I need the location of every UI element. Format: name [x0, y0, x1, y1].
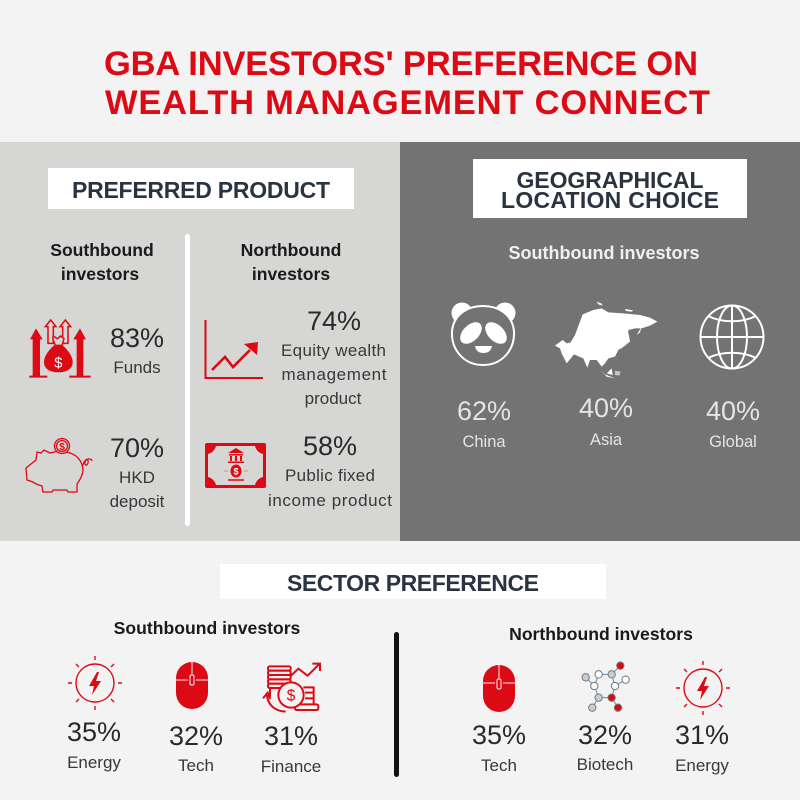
- subheading: southbound investors: Southbound investors: [508, 243, 700, 263]
- column heading: northbound investors: Northbound: [241, 240, 341, 260]
- icon: map of Asia: [555, 302, 657, 378]
- text: 62% china: 62%: [457, 396, 511, 426]
- icon: computer mouse: [176, 662, 208, 709]
- text: 40% asia: Asia: [590, 431, 623, 449]
- text: 62% china: China: [462, 433, 506, 451]
- text: 35% energy: 35%: [67, 717, 121, 747]
- column heading: southbound investors: Southbound: [50, 240, 154, 260]
- icon: energy: [68, 656, 122, 710]
- title: GBA INVESTORS' PREFERENCE ON: [104, 45, 698, 83]
- text: 70% HKD deposit: 70%: [110, 433, 164, 463]
- text: 40% global: [706, 396, 760, 451]
- panel: sector preference: [67, 564, 730, 777]
- heading: sector preference: [220, 564, 606, 599]
- text: 62% china: [457, 396, 511, 451]
- text: 74% equity wealth management product: Equity wealth: [281, 341, 386, 360]
- text: 40% global: Global: [709, 433, 757, 451]
- text: 35% tech: 35%: [472, 720, 526, 750]
- text: 83% funds: 83%: [110, 323, 164, 353]
- text: 83% funds: Funds: [113, 358, 161, 377]
- text: 58% public fixed income product: income product: [268, 491, 392, 510]
- text: 58% public fixed income product: [268, 431, 392, 510]
- text: 74% equity wealth management product: [281, 306, 387, 408]
- icon: finance coins: [263, 664, 320, 712]
- heading: preferred product: [48, 168, 354, 209]
- text: 35% energy: [67, 717, 121, 772]
- text: 74% equity wealth management product: product: [305, 389, 362, 408]
- text: 83% funds: [110, 323, 164, 377]
- heading: sector preference: SECTOR PREFERENCE: [287, 570, 539, 596]
- text: 74% equity wealth management product: management: [282, 365, 387, 384]
- text: 58% public fixed income product: Public fixed: [285, 466, 375, 485]
- text: 40% global: 40%: [706, 396, 760, 426]
- icon: piggy bank: [26, 438, 92, 492]
- icon: energy: [676, 661, 730, 715]
- icon: panda: [452, 302, 516, 365]
- panel: preferred product: [0, 142, 400, 541]
- heading: geographical location choice: [473, 159, 747, 218]
- text: 32% tech: 32%: [169, 721, 223, 751]
- icon: rising line chart: [206, 320, 263, 378]
- text: 35% tech: Tech: [481, 756, 517, 775]
- text: 35% energy: Energy: [67, 753, 121, 772]
- subheading: southbound investors: Southbound investors: [114, 618, 301, 638]
- text: 31% energy: [675, 720, 729, 775]
- heading: preferred product: PREFERRED PRODUCT: [72, 177, 330, 203]
- icon: computer mouse: [483, 665, 515, 712]
- icon: funds money bag with arrows: [29, 320, 91, 378]
- text: 70% HKD deposit: HKD: [119, 468, 155, 487]
- icon: finance coins: $: [287, 688, 296, 705]
- heading: geographical location choice: LOCATION CHOICE: [501, 187, 719, 213]
- text: 31% finance: [261, 721, 321, 776]
- text: 31% energy: 31%: [675, 720, 729, 750]
- text: 32% biotech: 32%: [578, 720, 632, 750]
- text: 32% biotech: Biotech: [577, 755, 633, 774]
- text: 32% tech: [169, 721, 223, 775]
- text: 32% tech: Tech: [178, 756, 214, 775]
- text: 31% finance: Finance: [261, 757, 321, 776]
- panel: geographical location choice: [400, 142, 800, 541]
- column heading: southbound investors: investors: [61, 264, 139, 284]
- text: 40% asia: [579, 393, 633, 449]
- text: 40% asia: 40%: [579, 393, 633, 423]
- title: [104, 45, 710, 122]
- title: WEALTH MANAGEMENT CONNECT: [105, 84, 710, 122]
- text: 32% biotech: [577, 720, 633, 774]
- subheading: northbound investors: Northbound investors: [509, 624, 693, 644]
- icon: banknote with bank: $: [233, 466, 239, 476]
- text: 70% HKD deposit: [110, 433, 165, 511]
- text: 35% tech: [472, 720, 526, 775]
- text: 31% finance: 31%: [264, 721, 318, 751]
- icon: globe: [700, 306, 764, 368]
- icon: banknote with bank: [205, 443, 266, 488]
- icon: funds money bag with arrows: $: [54, 356, 62, 372]
- text: 70% HKD deposit: deposit: [110, 492, 165, 511]
- text: 31% energy: Energy: [675, 756, 729, 775]
- icon: piggy bank: $: [59, 442, 65, 453]
- icon: biotech molecule: [582, 662, 629, 711]
- column heading: northbound investors: investors: [252, 264, 330, 284]
- text: 74% equity wealth management product: 74%: [307, 306, 361, 336]
- text: 58% public fixed income product: 58%: [303, 431, 357, 461]
- heading: geographical location choice: GEOGRAPHICAL: [516, 167, 704, 193]
